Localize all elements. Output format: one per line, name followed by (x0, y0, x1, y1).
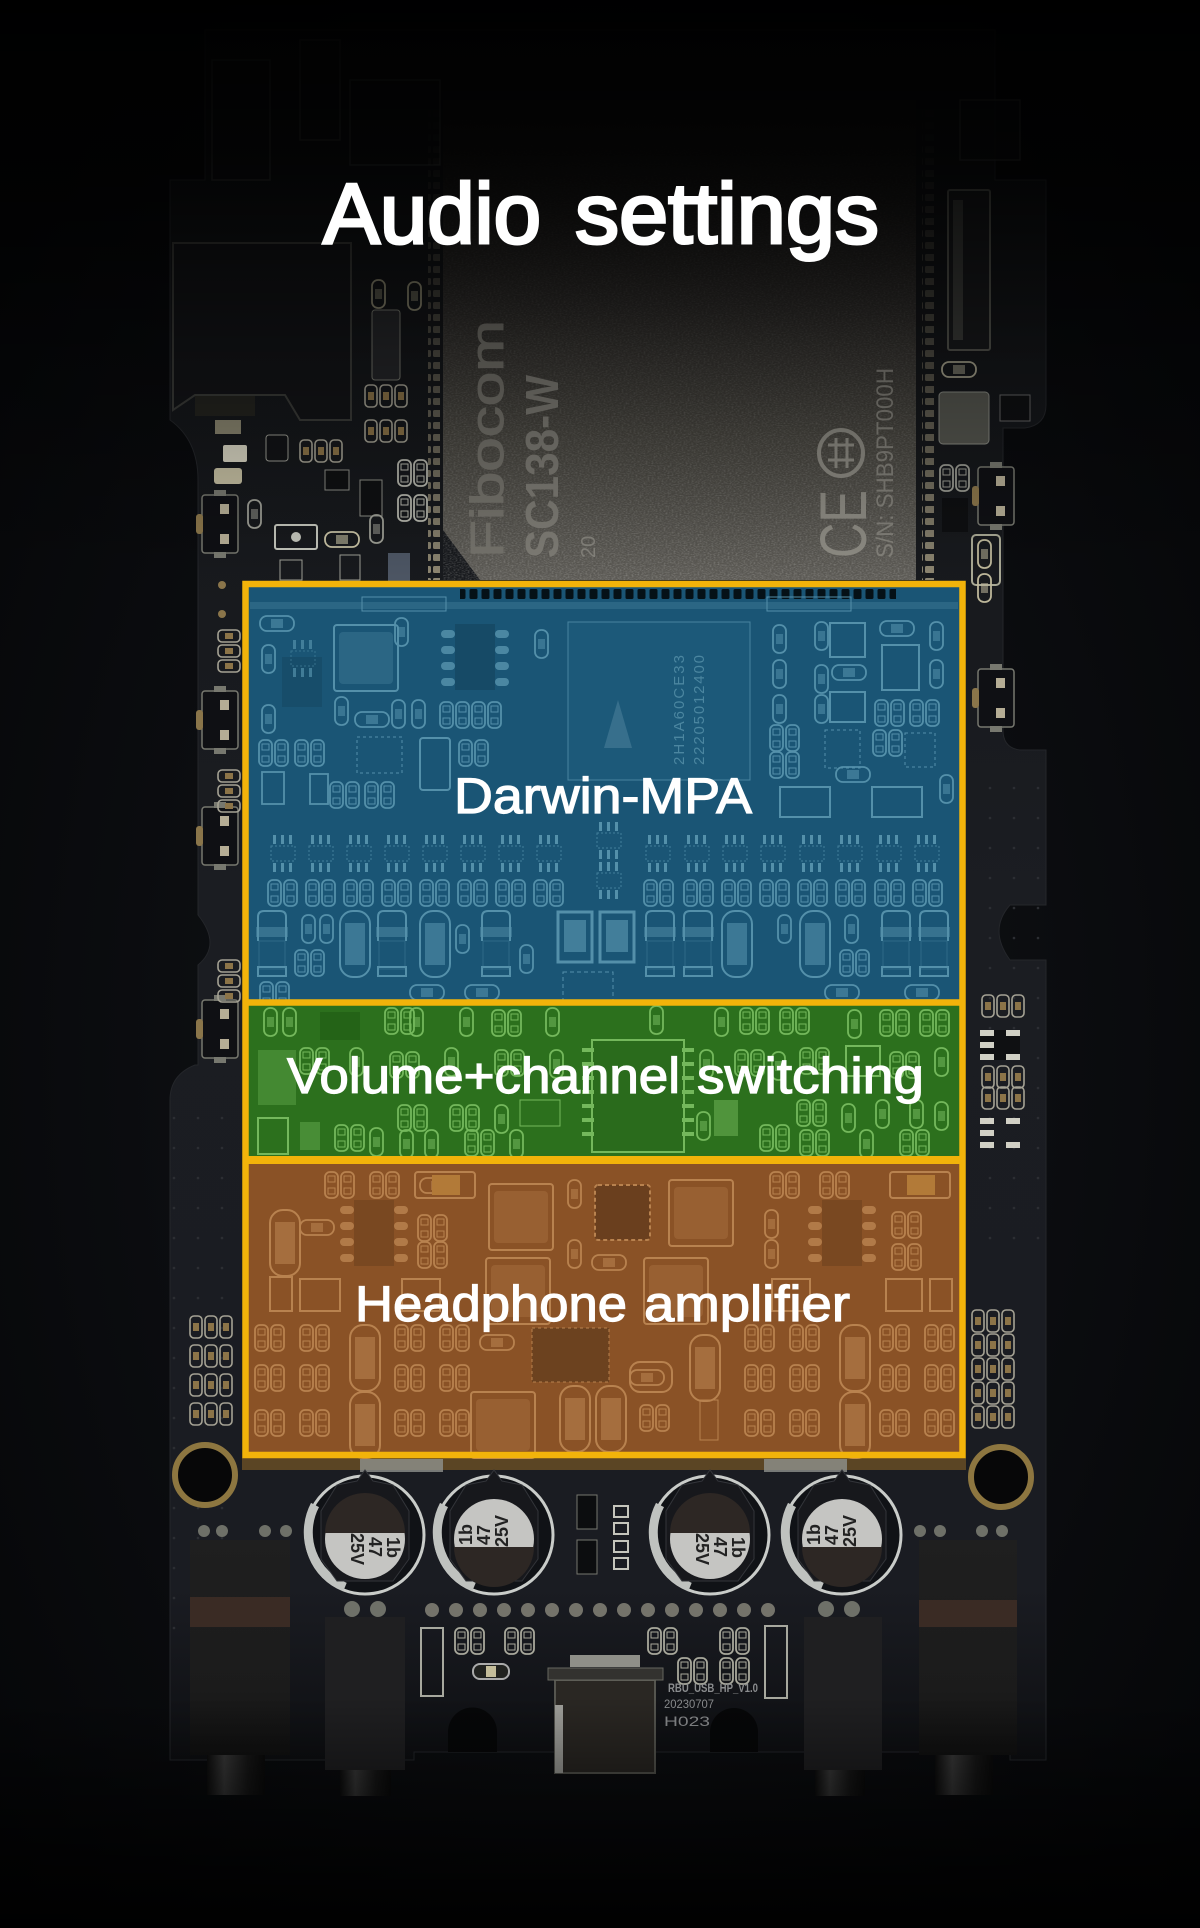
center transistors and pads (577, 1495, 628, 1574)
capacitor 3: 1b (728, 1537, 748, 1558)
silkscreen date: 20230707 (664, 1697, 714, 1711)
green fill (246, 1002, 962, 1160)
board outline (170, 30, 1046, 1760)
silkscreen board name: RBU_USB_HP_V1.0 (668, 1681, 758, 1695)
lower passives (421, 1626, 787, 1698)
right connector (948, 190, 990, 350)
label: Headphone amplifier: amplifier (644, 1276, 850, 1332)
module brand text: Fibocom (461, 320, 513, 558)
side switches left (196, 490, 238, 1063)
capacitor 1 (306, 1470, 424, 1594)
module serial text: S/N: SHB9PT000H (872, 368, 899, 558)
panel: Darwin-MPA block (246, 584, 962, 1008)
capacitor 2: 47 (474, 1525, 494, 1545)
module CE mark: CE (806, 490, 880, 558)
label: Headphone amplifier (355, 1276, 850, 1332)
solder pad row (425, 1603, 775, 1617)
gold edge strip (242, 1458, 966, 1470)
via dots right (972, 760, 1046, 1260)
side switches right (972, 462, 1014, 732)
silver solder patches (360, 1459, 847, 1472)
title (323, 167, 879, 262)
silkscreen code: H023 (664, 1713, 710, 1729)
label: Volume+channel switching (287, 1048, 924, 1104)
label: Volume+channel switching: Volume+channel (287, 1048, 680, 1104)
capacitor 2: 25V (492, 1515, 512, 1547)
module certification seal (819, 430, 863, 476)
title: Audio (323, 167, 541, 262)
panel: Volume and channel switching block (246, 1002, 962, 1160)
orange panel PCB traces (255, 1172, 954, 1458)
blue panel PCB traces (250, 587, 958, 1008)
module via rails (428, 206, 934, 580)
left edge pads (190, 581, 240, 1425)
capacitor 3: 25V (692, 1533, 712, 1565)
label: Headphone amplifier: Headphone (355, 1276, 627, 1332)
capacitor 4: 47 (822, 1525, 842, 1545)
capacitor 1: 47 (365, 1537, 385, 1557)
blue fill (246, 584, 962, 1002)
microSD slot (173, 243, 351, 434)
orange fill (246, 1160, 962, 1455)
capacitor 4: 1b (804, 1524, 824, 1545)
capacitor 4 (783, 1470, 901, 1594)
blue panel PCB traces: 2H1A60CE33 (671, 655, 688, 765)
via dots (170, 1090, 242, 1650)
right passives (939, 362, 1030, 602)
capacitor 1: 1b (383, 1537, 403, 1558)
capacitor 3: 47 (710, 1537, 730, 1557)
module small number: 20 (578, 536, 600, 558)
panel: Headphone amplifier block (246, 1160, 962, 1458)
module: metal shield (443, 221, 916, 580)
top components (212, 40, 1020, 180)
yellow frame and dividers (245, 584, 962, 1455)
capacitor 1: 25V (347, 1533, 367, 1565)
label: Volume+channel switching: switching (697, 1048, 924, 1104)
bottom notches (448, 1708, 758, 1752)
module model text: SC138-W (516, 374, 568, 558)
capacitor 2: 1b (456, 1524, 476, 1545)
label: Darwin-MPA: Darwin-MPA (454, 768, 753, 824)
mounting holes (175, 1445, 1031, 1507)
USB-C connector (548, 1668, 663, 1773)
green panel PCB traces (258, 1006, 949, 1158)
title: settings (575, 167, 879, 262)
capacitor 3 (651, 1470, 769, 1594)
capacitor 2 (435, 1470, 553, 1594)
blue panel PCB traces: 22205012400 (691, 655, 708, 765)
capacitor 4: 25V (840, 1515, 860, 1547)
right edge pads (972, 995, 1024, 1428)
headphone jacks (190, 1525, 1017, 1796)
left column passives (214, 280, 427, 581)
